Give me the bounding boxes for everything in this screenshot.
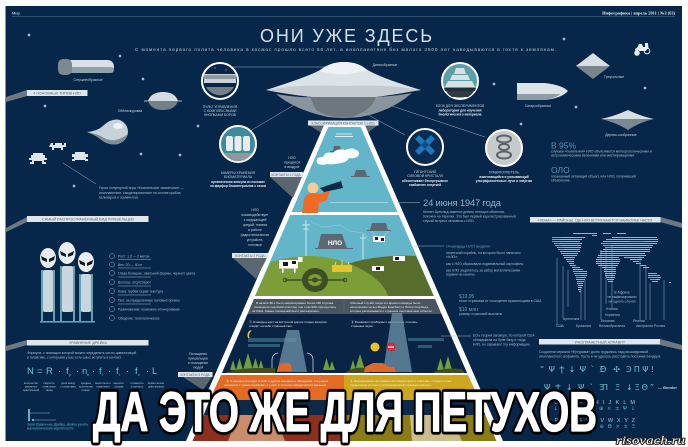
- Drake formula: ·: [92, 366, 95, 377]
- alien glyph message: ΨϮ↓Ψ`Ξ: [544, 382, 604, 392]
- Drake intro: в галактике, с которыми у нас есть шанс вступить в контакт.: [27, 356, 122, 360]
- alien traits list: [110, 254, 195, 320]
- contacts labels: [270, 156, 303, 198]
- space invaders: [29, 143, 88, 164]
- Drake small chart: математические вероятности: [27, 426, 73, 430]
- caption: crystal: снабжение энергией: [409, 183, 441, 187]
- pyramid level 4: orange and yellow panels: люди рядом и точки, у исследователей странные находки.: [350, 383, 432, 387]
- section bar: alien alphabet: ИНОПЛАНЕТНЫЙ АЛФАВИТ: [575, 340, 626, 344]
- map leader lines and country labels: Норвегия: [605, 313, 620, 317]
- caption: control panel: КНОПКАМИ БОРОВ: [204, 113, 237, 117]
- icon: ET on bicycle: [634, 43, 650, 56]
- Drake column notes: появления: [42, 386, 56, 388]
- caption: experiment block: лаборатория для изучения: [439, 108, 482, 112]
- fact: OLO: объяснение.: [551, 178, 571, 182]
- map leader lines and country labels: Австралия: [636, 324, 653, 328]
- header strip: Инфографика | апрель 2011 | №3 (63): [602, 10, 676, 16]
- map leader lines and country labels: Испания: [601, 319, 615, 323]
- Drake column notes: разума: [115, 386, 124, 388]
- classification label: КЛАССИФИКАЦИЯ КОНТАКТОВ С НЛО: [312, 121, 375, 125]
- pyramid level 4: orange and yellow panels: ③ Очевидец приходит в себя и другую внешность обнаружив, что рядом: [226, 378, 328, 383]
- pyramid level 3: notes band: [248, 299, 442, 314]
- ufo: spherical saucer: Обёлискуровая: [118, 109, 142, 113]
- fact: witnesses: гигантский корабль, на котором было написано: [446, 251, 521, 255]
- ufo: spherical saucer: [118, 92, 182, 113]
- Drake formula: i: [119, 372, 120, 377]
- contacts label 2: КОНТАКТЫ 2 РОДА: [235, 254, 266, 258]
- Drake formula: f: [116, 366, 119, 377]
- Drake formula: L: [152, 366, 157, 377]
- pyramid level 3: night road scene: и видит на небе странный свет.: [249, 324, 293, 328]
- ufo: bullet: Сигарообразные: [525, 104, 551, 108]
- Drake formula: [27, 366, 157, 377]
- pyramid level 3: notes band: которых рассказывали о странном инопланетном событии.: [350, 309, 433, 313]
- Drake formula: n: [82, 366, 87, 377]
- Drake formula: p: [69, 372, 72, 377]
- caption: engine: ультрафиолетовые лучи и энергию: [476, 179, 533, 183]
- fact: 95%: астрономическими явлениями или мистификациями: [551, 154, 634, 158]
- striped world map: [552, 234, 671, 292]
- alien traits list: Общение: телепатическое: [118, 316, 160, 320]
- ufo: disc: Дерево-хообразные: [605, 133, 637, 137]
- Drake formula: e: [87, 372, 90, 377]
- alien glyph message: ϿΠΨ!: [626, 365, 654, 374]
- alphabet intro: инопланетного алфавита. Пусть и не удалось расставить послание Бендера:: [539, 354, 661, 358]
- aliens illustration: [40, 242, 95, 323]
- invaders note: инопланетяне, смоделированные на основе крабов,: [99, 191, 181, 195]
- fact: prices: $19,95: [459, 294, 475, 300]
- pyramid frame: [186, 124, 503, 441]
- fact: date 24 June 1947: похожих на тарелки. Это был первый зарегистрированный: [423, 214, 516, 218]
- section bar: Drake equation: УРАВНЕНИЕ ДРЕЙКА: [69, 341, 108, 345]
- icon: bio cameras: [220, 126, 256, 162]
- fact: conspiracy: Есть теория заговора, по которой США: [473, 334, 535, 338]
- invaders note: [63, 163, 184, 200]
- alphabet intro: Создатели сериала «Футурама» долго трудились над расшифровкой: [539, 350, 648, 354]
- section bar: UFO types: [6, 90, 88, 102]
- small contact label 3: Похищения: [189, 352, 207, 356]
- fact: prices: $10 млн: [459, 307, 478, 313]
- caption: control panel: С КОМПЛЕКСНЫМИ: [204, 109, 237, 113]
- caption: control panel: [203, 105, 238, 117]
- map leader lines and country labels: Великобритания: [599, 324, 625, 328]
- Drake formula: ·: [146, 366, 149, 377]
- alien glyph message: “ΨϮ↓Ψ`Ξ: [540, 364, 604, 374]
- section bar: aliens: САМЫЙ РАСПРОСТРАНЁННЫЙ ВИД ПРИШЕЛЬЦЕВ: [42, 218, 134, 222]
- Drake formula: c: [138, 372, 140, 377]
- fact: conspiracy: обнаружили на Луне базу и тогда: [473, 338, 526, 342]
- header strip: [12, 10, 676, 16]
- Drake formula: l: [102, 372, 103, 377]
- fact: witnesses: «НЛО»;: [446, 255, 458, 259]
- pyramid level 3: night road scene: ① Очевидец едет на восточной дороге поздно вечером: [249, 319, 327, 324]
- contacts labels: НЛО: [288, 156, 296, 160]
- caption: experiment block: биологического материала: [439, 112, 482, 116]
- ufo: bullet: [517, 83, 568, 108]
- invaders note: Герои популярной игры «Космические захватчики» —: [99, 186, 184, 190]
- alphabet intro: [539, 350, 661, 358]
- alien glyph message: ΠΞ: [602, 383, 620, 392]
- alphabet key: N O P Q R S T U V W X Y Z: [539, 418, 636, 424]
- pyramid level 4: orange and yellow panels: [192, 375, 496, 441]
- pyramid level 4: orange and yellow panels: ④ Исследование инопланетной лаборатории и спасение, странно голые: [350, 378, 452, 383]
- section bar: UFO types: 4 ОСНОВНЫХ ТИПОВ НЛО: [33, 91, 81, 95]
- fact: 95%: случаев «появления» НЛО объясняются метеорологическими и: [551, 150, 652, 154]
- contacts label 2: поломки: [248, 243, 262, 247]
- watermark: risovach.ru: [616, 435, 685, 447]
- Drake formula: ·: [58, 366, 61, 377]
- map leader lines and country labels: США: [556, 324, 565, 328]
- Drake formula: f: [66, 366, 69, 377]
- caption: crystal: СИЛОВОЙ КРИСТАЛЛ: [407, 174, 443, 178]
- map leader lines and country labels: Бразилия: [576, 324, 591, 328]
- Drake column notes: вероятн.: [114, 382, 125, 385]
- Drake column notes: количество: [79, 386, 94, 388]
- pyramid level 2: abduction field: [255, 215, 434, 296]
- contacts label 2: [232, 208, 270, 279]
- fact: OLO: опознанный летающий объект, или НЛО, получивший: [551, 174, 636, 178]
- pyramid level 2: abduction field: НЛО: [328, 240, 342, 247]
- subtitle: С момента первого полета человека в космос прошло всего 50 лет, а инопланетяне без малого 2500 лет наведываются в гости к землянам.: [135, 47, 556, 52]
- section bar: Drake equation: [6, 340, 148, 351]
- pyramid level 3: night road scene: ② Возникают проблемы с двигателем, слышны: [351, 319, 417, 324]
- alien traits list: Рост: 1,2 — 2 метра: [118, 254, 149, 258]
- small contact label 3: пришельцев: [188, 356, 208, 360]
- alien glyph message: ↓ΞΘ”: [626, 383, 654, 392]
- ufo: triangular: [576, 53, 624, 79]
- caption: bio cameras: [210, 171, 267, 188]
- fact: OLO: [551, 165, 636, 182]
- contacts label 2: средой: помехи: [243, 223, 267, 227]
- Drake column notes: среднее: [81, 382, 92, 385]
- Drake column notes: планет: [82, 389, 91, 392]
- pyramid level 1: observer: [292, 127, 398, 213]
- icon: control panel: [202, 63, 238, 99]
- Drake column notes: скорость: [43, 382, 55, 385]
- fact: conspiracy: [441, 334, 535, 346]
- caption: control panel: ПУЛЬТ УПРАВЛЕНИЯ: [203, 105, 238, 109]
- contacts label 2: устройств,: [247, 238, 263, 242]
- section bar: aliens: [6, 216, 148, 232]
- pyramid level 3: night road scene: [222, 313, 467, 373]
- alien traits list: Кожа: грубая серая текстура: [118, 290, 163, 294]
- contacts labels: в воздухе: [284, 165, 300, 169]
- fact: prices: [459, 294, 542, 316]
- caption: crystal: [402, 170, 448, 187]
- Drake formula: R: [46, 366, 53, 377]
- Drake intro: [27, 351, 136, 360]
- icon: experiment block: [442, 63, 478, 99]
- contacts label 2: в работе: [248, 228, 262, 232]
- map leader lines and country labels: Аргентина: [563, 317, 579, 321]
- caption: experiment block: БЛОК ДЛЯ ЭКСПЕРИМЕНТОВ: [436, 104, 485, 108]
- Drake formula: N: [27, 366, 34, 377]
- alien glyph message: Θ✣: [600, 365, 620, 374]
- Drake formula: f: [99, 366, 102, 377]
- Drake formula: f: [135, 366, 138, 377]
- alien traits list: Размножение: возможно клонирование: [118, 308, 180, 312]
- Drake column notes: с планетами: [60, 386, 76, 388]
- fact: date 24 June 1947: [397, 198, 516, 223]
- fact: 95%: [551, 140, 652, 158]
- fact: prices: стоит страховка от похищения пришельцами в США: [459, 299, 542, 303]
- map leader lines and country labels: Италия: [606, 307, 618, 311]
- Drake column notes: готовность: [130, 382, 144, 385]
- Drake column notes: доля звёзд: [61, 381, 75, 385]
- map leader lines and country labels: ни одного случая: [608, 300, 636, 304]
- caption: bio cameras: КАМЕРЫ ХРАНЕНИЯ: [221, 171, 256, 175]
- pyramid level 3: notes band: Обычный случай, когда это время очевидцы были: [350, 301, 421, 305]
- map leader lines and country labels: Япония: [633, 319, 645, 323]
- alphabet key: Ϯ Θ Ψ Ξ Π ↓ Ϟ Ψ ⊕ Θ × ± Ξ: [539, 424, 635, 430]
- pyramid level 3: notes band: неосознанно ночью Бадди Кемпбелл и Питер Скорбеда,: [350, 305, 429, 309]
- fact: date 24 June 1947: Кеннет Арнольд заметил девять летящих объектов,: [423, 210, 505, 214]
- stars: [27, 33, 647, 188]
- fact: 95%: В 95%: [551, 140, 576, 150]
- alien traits list: Пол: неопределенные половые органы: [118, 298, 180, 302]
- ufo: cylinder: [58, 59, 114, 82]
- Drake column notes: количество: [24, 382, 39, 385]
- Drake small chart: Зная Уравнение Дрейка, можно узнать: [27, 422, 88, 426]
- caption: bio cameras: органическая капсула из похожих: [211, 180, 265, 184]
- Drake column notes: время жизни: [148, 382, 164, 385]
- contacts label 2: взаимодействует: [242, 213, 269, 217]
- fact: prices: размер страховой выплаты: [459, 312, 503, 316]
- contacts labels: КОНТАКТЫ 1 ГОДА: [272, 173, 301, 177]
- fact: witnesses: Очевидцы НЛО видели:: [446, 244, 491, 248]
- Drake column notes: цивилизации: [148, 386, 165, 388]
- caption: crystal: ГИГАНТСКИЙ: [414, 170, 437, 174]
- classification label shadow: [309, 125, 378, 137]
- Drake column notes: разумных: [25, 386, 38, 388]
- leader lines from saucer: [222, 67, 485, 137]
- section bar: zone 51: «ЗОНА» — РАЙОНЫ, ГДЕ НЛО ВСТРЕЧАЮТСЯ НАИБОЛЕЕ ЧАСТО: [538, 218, 653, 222]
- caption: bio cameras: на фарфор биоматериалов с газом: [210, 184, 267, 188]
- main flying saucer: Дискообразные: [373, 63, 397, 67]
- alien traits list: Волосы: отсутствуют: [118, 280, 151, 284]
- invaders note: кальмаров и осьминогов.: [99, 196, 139, 200]
- small contact label 3: людей: [193, 366, 203, 370]
- map leader lines and country labels: В Африке: [614, 290, 630, 294]
- contacts label 2: НЛО: [251, 208, 259, 212]
- alphabet key: Ψ Ϯ ↓ Ξ Θ Π Ϟ Θ ⊕ × ± Ψ ↓: [539, 406, 635, 412]
- small contact label 3: КОНТАКТЫ 3 РОДА: [180, 373, 211, 377]
- contacts labels: находится: [284, 160, 300, 164]
- alphabet key: A B C D E F G H I J K L M: [539, 400, 635, 406]
- Drake column notes: вероятность: [95, 382, 111, 385]
- alien traits list: Вес: 20 — 40 кг: [118, 263, 143, 267]
- Drake column notes: звёзд: [46, 388, 53, 392]
- alien glyph message: — Bender: [658, 385, 677, 390]
- caption: engine: [476, 170, 533, 183]
- caption: bio cameras: БИОМАТЕРИАЛА: [224, 175, 253, 179]
- header strip: Мир: [12, 10, 21, 16]
- Drake column notes: появления: [96, 386, 110, 388]
- Drake intro: Формула, с помощью которой можно определить число цивилизаций: [27, 351, 136, 355]
- Drake column notes: к контакту: [131, 386, 144, 388]
- Drake column notes: [23, 381, 165, 392]
- small contact label 3: и похищение: [188, 361, 208, 365]
- fact: date 24 June 1947: 24 июня 1947 года: [423, 198, 502, 209]
- Drake small chart: [27, 409, 88, 430]
- fact: witnesses: ворами на канаты.: [446, 272, 475, 276]
- caption: engine: изменяющийся и уплывающий: [479, 175, 529, 179]
- contacts label 2: радиотехнических: [241, 233, 270, 237]
- Drake column notes: цивилизаций: [23, 388, 40, 392]
- caption: crystal: обеспечивает беспрерывное: [402, 179, 448, 183]
- icon: engine: [486, 130, 522, 166]
- fact: witnesses: как с НЛО образовали подземельный картофель;: [446, 262, 524, 266]
- main flying saucer: [266, 62, 421, 118]
- section bar: alien alphabet: [539, 339, 682, 350]
- pyramid level 3: notes band: В начале 80-х было зафиксировано более 180 случаев: [256, 301, 334, 305]
- fact: witnesses: [414, 244, 524, 276]
- title: ОНИ УЖЕ ЗДЕСЬ: [260, 26, 432, 46]
- map leader lines and country labels: Россия: [654, 324, 665, 328]
- pyramid level 3: night road scene: странные звуки.: [351, 324, 374, 328]
- contacts label 2: с окружающей: [244, 218, 267, 222]
- Drake formula: ·: [108, 366, 111, 377]
- ufo: triangular: Треугольные: [604, 75, 624, 79]
- alien traits list: Глаза большие, овальной формы, черного цвета: [118, 272, 195, 276]
- small contact label 3: [178, 352, 212, 390]
- fact: date 24 June 1947: случай встречи человека с НЛО.: [423, 219, 475, 223]
- pyramid level 4: orange and yellow panels: находится с чужим кораблём, а у него в течение определённого времени.: [224, 383, 327, 387]
- fact: witnesses: как НЛО зацепилось за забор металлическими: [446, 268, 520, 272]
- caption: experiment block: [436, 104, 485, 116]
- ufo: drop: [87, 120, 128, 144]
- Drake formula: ·: [126, 366, 129, 377]
- pyramid level 3: notes band: на США. Самых похищений было рассекречено.: [252, 309, 320, 313]
- Drake formula: =: [37, 366, 43, 377]
- alien glyph message: [540, 364, 677, 392]
- section bar: zone 51: [530, 217, 682, 228]
- map leader lines and country labels: не зафиксировано: [607, 295, 637, 299]
- ufo: cylinder: Стержнеобразные: [73, 78, 103, 82]
- pyramid level 3: notes band: похищения подобной ответчик, при этом 90% приходилось: [254, 305, 337, 309]
- caption: engine: ГРАВИТОУЛЕТЕЛЬ: [489, 170, 520, 174]
- Drake formula: ·: [76, 366, 79, 377]
- ufo: disc: [601, 110, 654, 137]
- icon: crystal: [407, 129, 443, 165]
- alphabet key: [539, 400, 636, 430]
- map leader lines and country labels: [556, 246, 665, 328]
- fact: OLO: ОЛО: [551, 165, 570, 175]
- fact: conspiracy: НЛО, но скрывают эту информацию.: [473, 342, 531, 346]
